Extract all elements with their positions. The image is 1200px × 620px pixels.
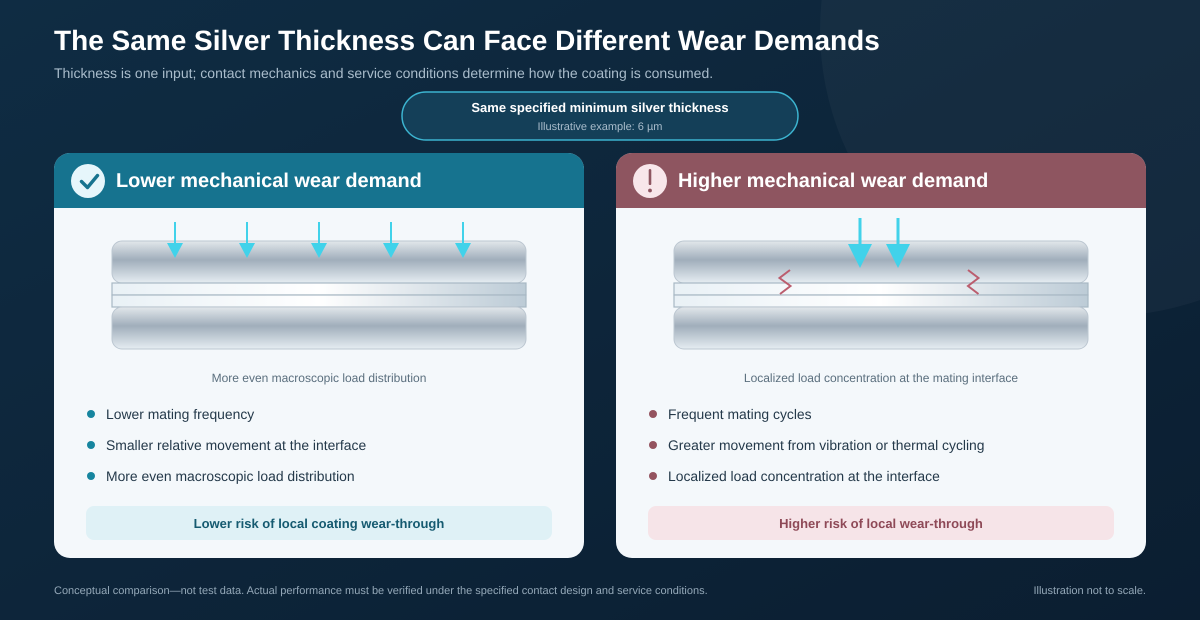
- arrows: concentrated load: [848, 218, 910, 268]
- bullet list: [87, 406, 366, 484]
- bullet list: Localized load concentration at the interface: [668, 468, 940, 484]
- panel: higher demand: [616, 153, 1146, 558]
- panel: lower demand: [54, 153, 584, 558]
- diagram: concentrated load: [674, 218, 1088, 349]
- callout: same thickness: [402, 92, 798, 140]
- bullet list: Frequent mating cycles: [668, 406, 812, 422]
- panel header: higher demand: [616, 153, 1146, 208]
- panel heading: Lower mechanical wear demand: [116, 170, 422, 192]
- panel heading: Higher mechanical wear demand: [678, 170, 988, 192]
- verdict: higher risk: [648, 506, 1114, 540]
- bullet list: Lower mating frequency: [106, 406, 254, 422]
- verdict: lower risk: Lower risk of local coating wear-through: [194, 516, 444, 531]
- bullet list: Greater movement from vibration or thermal cycling: [668, 437, 985, 453]
- scale note: Illustration not to scale.: [1033, 585, 1146, 597]
- title: The Same Silver Thickness Can Face Different Wear Demands: [54, 25, 880, 56]
- icon: warning: [633, 164, 667, 198]
- callout: same thickness: Same specified minimum silver thickness: [471, 100, 729, 115]
- footnote: Conceptual comparison—not test data. Actual performance must be verified under the specified contact design and service conditions.: [54, 585, 708, 597]
- arrows: even load: [167, 222, 471, 258]
- diagram caption: Localized load concentration at the mating interface: [744, 371, 1018, 385]
- diagram caption: More even macroscopic load distribution: [212, 371, 426, 385]
- callout: same thickness: Illustrative example: 6 µm: [538, 121, 662, 133]
- icon: check: [71, 164, 105, 198]
- verdict: lower risk: [86, 506, 552, 540]
- bullet list: Smaller relative movement at the interface: [106, 437, 366, 453]
- diagram: even load: [112, 222, 526, 349]
- verdict: higher risk: Higher risk of local wear-through: [779, 516, 983, 531]
- wear marks: [780, 270, 978, 294]
- subtitle: Thickness is one input; contact mechanics and service conditions determine how the coating is consumed.: [54, 65, 713, 81]
- panel header: lower demand: [54, 153, 584, 208]
- bullet list: [649, 406, 985, 484]
- bullet list: More even macroscopic load distribution: [106, 468, 355, 484]
